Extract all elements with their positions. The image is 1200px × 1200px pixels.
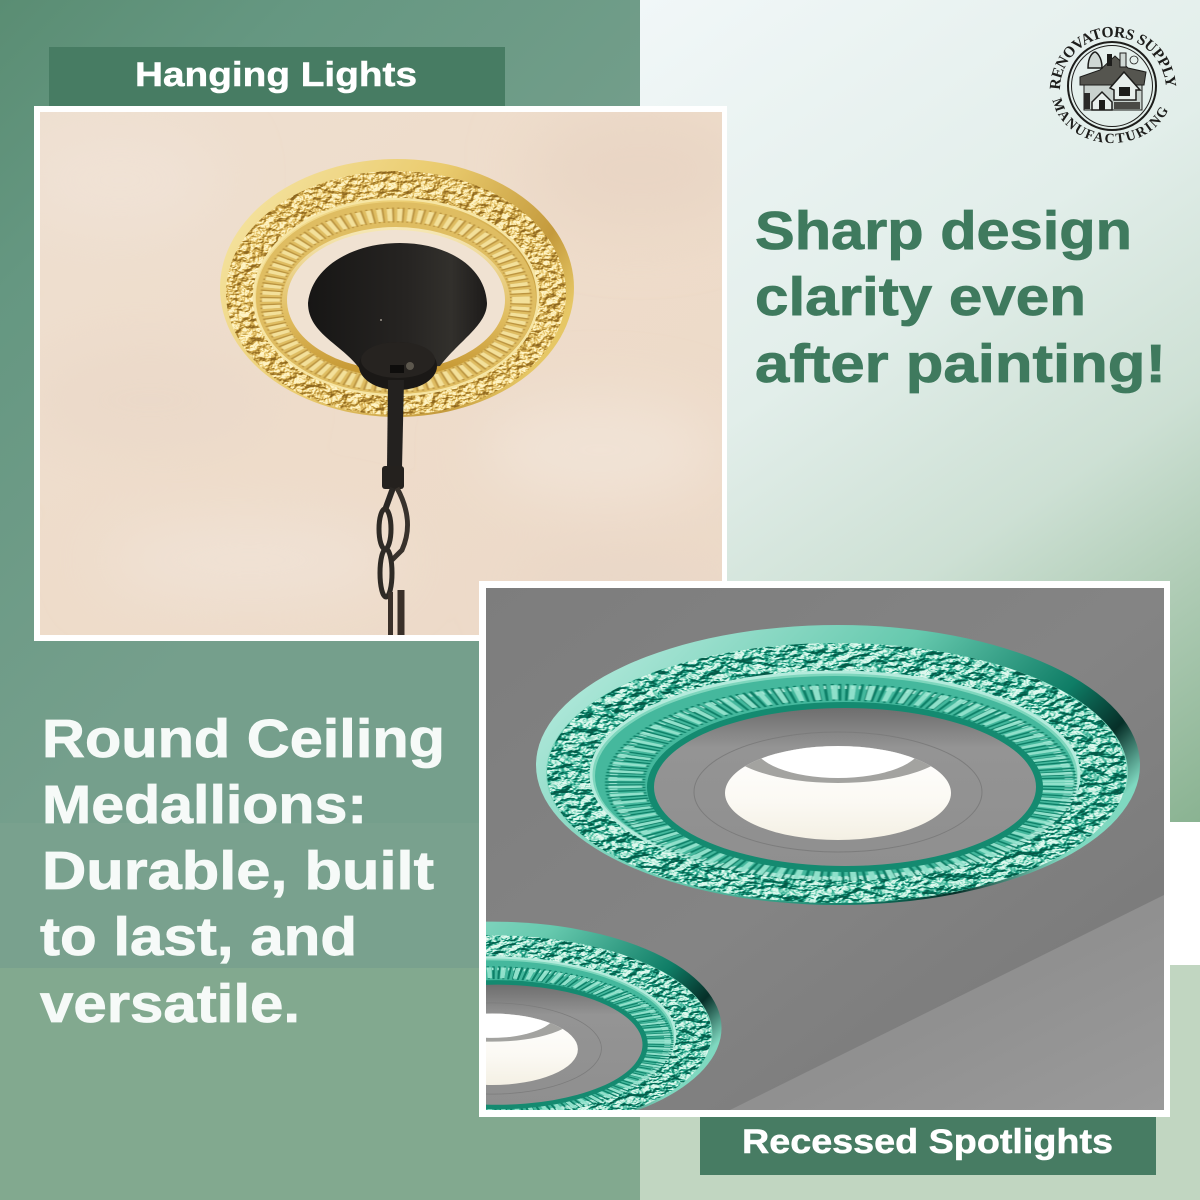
pendant rod and chain (379, 380, 408, 636)
label: Recessed Spotlights: Recessed Spotlights (742, 1123, 1113, 1161)
background: left green column (0, 0, 640, 1200)
large teal medallion with spotlight (536, 625, 1140, 905)
heading: round ceiling medallions: versatile. (40, 974, 300, 1034)
heading: round ceiling medallions: to last, and (40, 907, 357, 967)
heading: sharp design clarity: after painting! (755, 334, 1166, 394)
background: right gradient panel (640, 0, 1200, 1200)
label: Hanging Lights: Hanging Lights (135, 56, 417, 94)
heading: round ceiling medallions: Medallions: (42, 775, 367, 835)
photo panel: recessed spotlights in teal medallions (479, 581, 1170, 1117)
heading: round ceiling medallions: Durable, built (42, 841, 434, 901)
heading: sharp design clarity (755, 201, 1166, 394)
ceiling backdrop (20, 110, 750, 635)
black ceiling canopy (308, 243, 487, 390)
logo: Renovators Supply Manufacturing: MANUFACTURING (1052, 97, 1168, 144)
label: Recessed Spotlights (700, 1117, 1156, 1175)
heading: round ceiling medallions (40, 709, 445, 1034)
logo: Renovators Supply Manufacturing: RENOVATORS SUPPLY (1050, 26, 1176, 90)
photo panel: hanging light on gold medallion (20, 106, 750, 641)
heading: round ceiling medallions: Round Ceiling (42, 709, 445, 769)
heading: sharp design clarity: clarity even (755, 267, 1086, 327)
heading: sharp design clarity: Sharp design (755, 201, 1132, 261)
label: Hanging Lights (49, 47, 505, 106)
gold ceiling medallion (220, 159, 574, 417)
grey ceiling and wall (486, 588, 1164, 1110)
logo: Renovators Supply Manufacturing (1050, 26, 1176, 144)
icon: house (1080, 52, 1146, 110)
small teal medallion with spotlight (486, 922, 722, 1110)
